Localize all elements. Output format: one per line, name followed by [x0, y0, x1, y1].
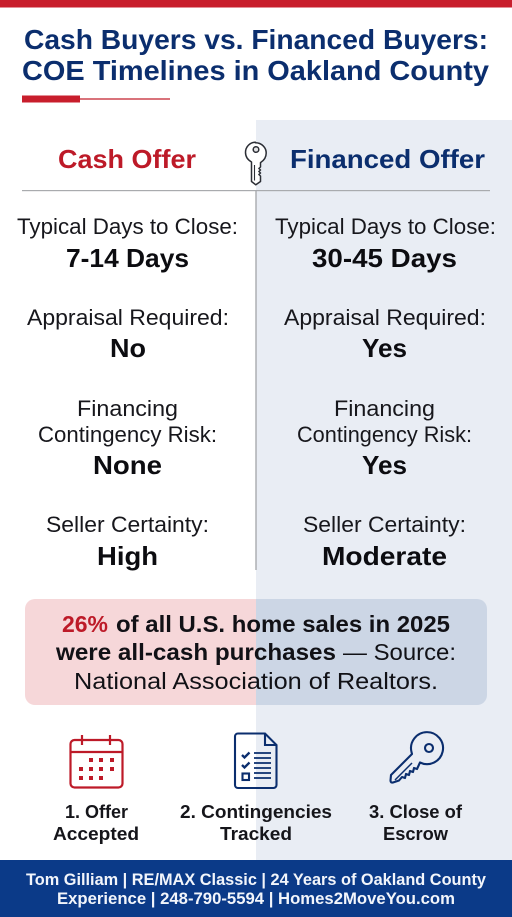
panel: cash column [17, 214, 238, 571]
header divider [22, 190, 490, 191]
callout: — Source: [343, 639, 456, 665]
appraisal, cash [27, 305, 229, 363]
financing risk, cash [38, 396, 217, 480]
seller certainty, financed: Seller Certainty: [303, 512, 466, 537]
callout [25, 599, 487, 705]
financing risk, financed: Yes [362, 450, 407, 480]
financing risk, cash: Financing [77, 396, 178, 421]
callout: National Association of Realtors. [74, 668, 438, 694]
typical days, financed: 30-45 Days [312, 243, 457, 273]
panel: financed background [256, 120, 512, 860]
seller certainty, cash [46, 512, 209, 571]
financing risk, financed [297, 396, 472, 480]
column divider [255, 190, 257, 570]
callout: of all U.S. home sales in 2025 [116, 611, 450, 637]
seller certainty, cash: High [97, 541, 158, 571]
step 2: contingencies tracked: Tracked [220, 824, 292, 844]
appraisal, financed: Appraisal Required: [284, 305, 486, 330]
seller certainty, cash: Seller Certainty: [46, 512, 209, 537]
step 1: offer accepted: 1. Offer [65, 802, 128, 822]
step 1: offer accepted [53, 735, 139, 844]
footer: Experience | 248-790-5594 | Homes2MoveYou.com [57, 889, 455, 908]
step 1: offer accepted: Accepted [53, 824, 139, 844]
icon: checklist document [235, 734, 276, 788]
seller certainty, financed: Moderate [322, 541, 447, 571]
step 2: contingencies tracked: 2. Contingencies [180, 802, 332, 822]
panel: financed column [275, 214, 496, 571]
icon: key [390, 732, 443, 783]
typical days, cash [17, 214, 238, 273]
icon: calendar [70, 735, 122, 788]
heading: cash offer: Cash Offer [58, 144, 196, 174]
step 2: contingencies tracked [180, 734, 332, 844]
callout: were all-cash purchases [55, 639, 336, 665]
icon: center key [246, 142, 266, 185]
footer: Tom Gilliam | RE/MAX Classic | 24 Years of Oakland County [26, 870, 487, 889]
financing risk, cash: Contingency Risk: [38, 422, 217, 447]
typical days, cash: 7-14 Days [66, 243, 189, 273]
footer [0, 860, 512, 917]
heading: financed offer: Financed Offer [290, 144, 485, 174]
title [22, 24, 489, 86]
step 3: close of escrow: 3. Close of [369, 802, 463, 822]
title: COE Timelines in Oakland County [22, 55, 489, 86]
appraisal, financed [284, 305, 486, 363]
step 3: close of escrow [369, 732, 463, 844]
appraisal, cash: Appraisal Required: [27, 305, 229, 330]
appraisal, cash: No [110, 333, 146, 363]
top red bar [0, 0, 512, 8]
callout: 26% [62, 611, 108, 637]
seller certainty, financed [303, 512, 466, 571]
appraisal, financed: Yes [362, 333, 407, 363]
title underline [22, 96, 170, 102]
financing risk, cash: None [93, 450, 162, 480]
financing risk, financed: Financing [334, 396, 435, 421]
step 3: close of escrow: Escrow [383, 824, 449, 844]
typical days, financed [275, 214, 496, 273]
title: Cash Buyers vs. Financed Buyers: [24, 24, 488, 55]
financing risk, financed: Contingency Risk: [297, 422, 472, 447]
typical days, financed: Typical Days to Close: [275, 214, 496, 239]
typical days, cash: Typical Days to Close: [17, 214, 238, 239]
